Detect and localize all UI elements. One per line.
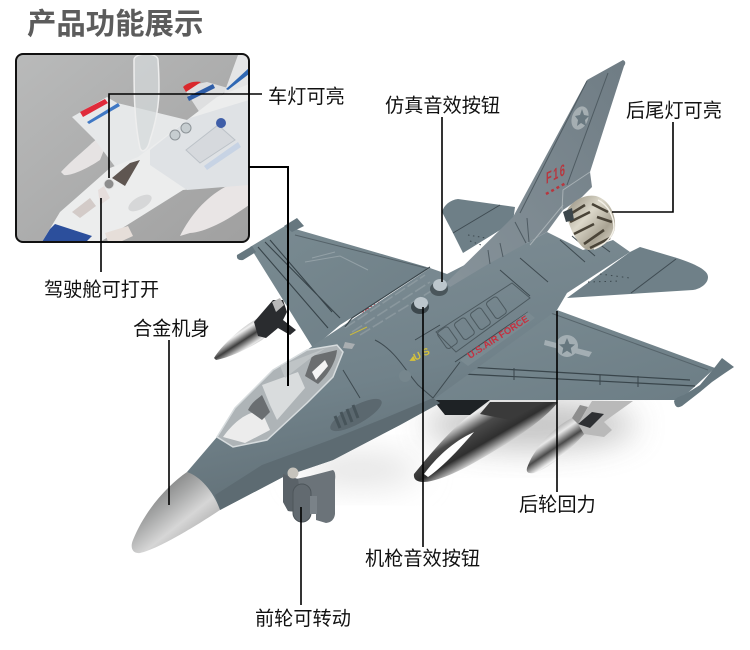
leader lines — [101, 94, 673, 605]
left stabilizer — [442, 199, 515, 253]
air force band — [460, 312, 535, 366]
leader: sound button — [441, 117, 443, 282]
label: alloy body: 合金机身 — [133, 318, 210, 340]
label: tail light: 后尾灯可亮 — [626, 100, 722, 122]
panel lines — [343, 232, 610, 398]
inset: vent slats — [186, 125, 235, 163]
silver nose cone — [132, 472, 220, 553]
inset: nose gear — [105, 226, 133, 242]
inset: rear stabilizer — [183, 82, 228, 113]
label: rear wheel pull back: 后轮回力 — [519, 494, 596, 516]
wing red text: U.S AIR FORCE — [357, 277, 424, 320]
inset: air intake — [128, 194, 152, 212]
inset: drop tank — [180, 185, 248, 236]
side vent — [326, 393, 386, 437]
dark under fuselage — [433, 400, 490, 415]
inset: cockpit opening — [112, 160, 140, 186]
inset: tail fin — [224, 55, 248, 94]
exhaust nozzle — [563, 196, 615, 250]
inset: open canopy — [134, 54, 159, 151]
label: front wheel rotates: 前轮可转动 — [255, 608, 351, 630]
inset: fuselage — [42, 94, 224, 241]
label: headlight: 车灯可亮 — [268, 86, 345, 108]
fuselage: U.S.AIR FORCE — [466, 314, 531, 362]
inset: buttons — [170, 130, 180, 140]
right stabilizer — [567, 247, 708, 298]
left missile — [214, 298, 296, 360]
yellow US mark: ◂U S — [407, 346, 432, 366]
label: simulated sound button: 仿真音效按钮 — [385, 95, 500, 117]
inset: front light — [104, 180, 114, 188]
canopy — [217, 342, 355, 447]
tail fin — [446, 60, 625, 287]
roundel star — [544, 335, 592, 357]
leader: headlight — [109, 94, 262, 178]
chrome drop tank — [414, 402, 558, 482]
label: cockpit opens: 驾驶舱可打开 — [44, 279, 159, 301]
panel: main fighter jet model — [132, 60, 734, 553]
inset: left missile — [61, 138, 104, 175]
leader: tail light — [612, 122, 673, 212]
sound buttons — [411, 279, 448, 314]
inset: left wing — [72, 97, 187, 168]
title: 产品功能展示 — [27, 8, 203, 41]
right wing missile — [527, 401, 633, 473]
leader: gun button — [422, 307, 424, 547]
right wing — [433, 310, 734, 407]
leader: cockpit opens — [100, 198, 102, 272]
vent slats — [436, 283, 530, 352]
label: gun sound button: 机枪音效按钮 — [365, 548, 480, 570]
tail code F16: F16 — [546, 160, 566, 188]
fuselage — [187, 232, 630, 510]
panel: cockpit close-up inset — [16, 54, 249, 242]
leader: rear wheel — [556, 311, 558, 492]
ground shadow — [300, 401, 635, 486]
leader: front wheel — [300, 507, 302, 605]
nose gear and wheel — [283, 468, 335, 523]
leader: inset to canopy — [249, 167, 288, 386]
inset: roundel — [216, 118, 226, 128]
left wing — [237, 218, 430, 348]
leader: alloy body — [168, 340, 170, 505]
